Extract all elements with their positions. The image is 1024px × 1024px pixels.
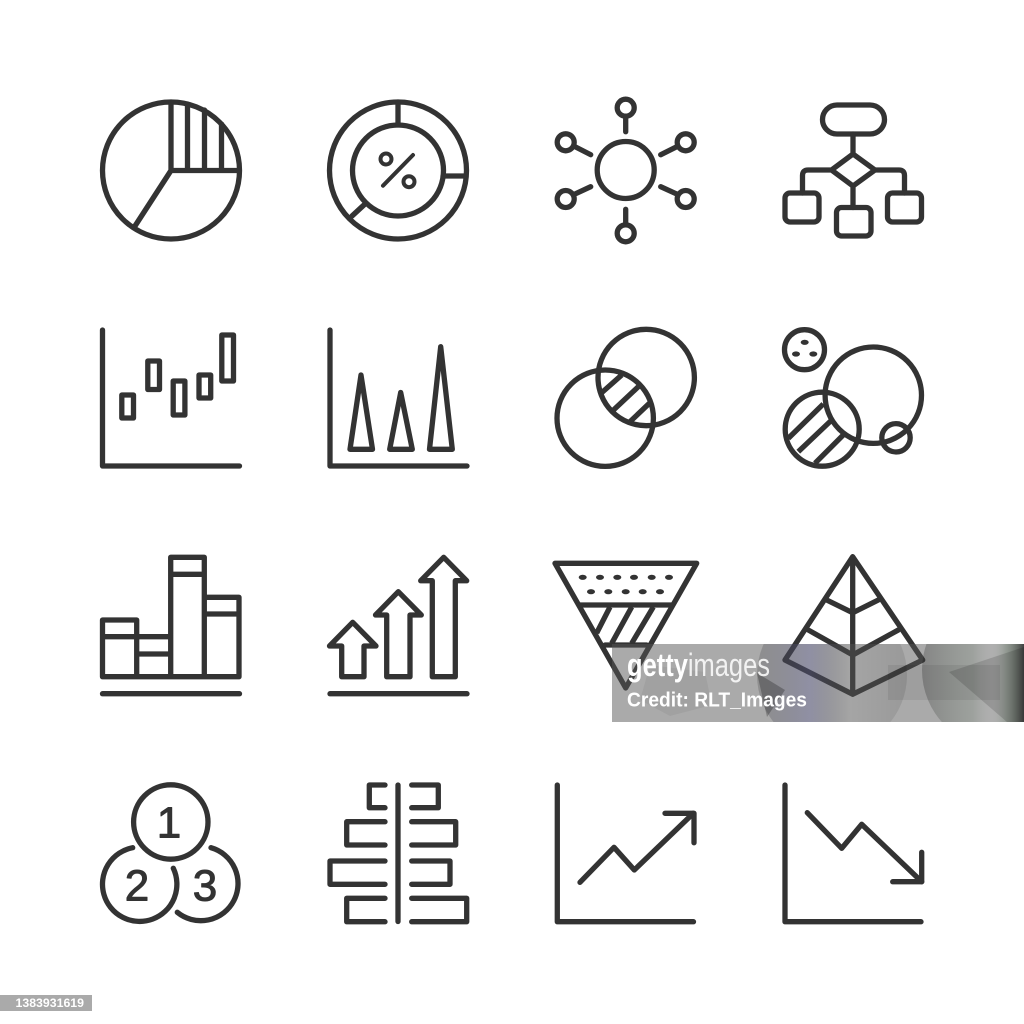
icon: candlestick chart: [102, 330, 240, 466]
icon: upward trend line chart: [557, 785, 694, 922]
icon: bubble chart: [784, 330, 922, 466]
watermark logo text: gettyimages: [627, 647, 770, 683]
icon: three numbered circles: 1: [157, 798, 181, 848]
icon: three numbered circles: [102, 785, 238, 921]
watermark banner: [612, 644, 1024, 722]
icon: percent donut chart: [330, 102, 466, 239]
icon: population pyramid chart: [330, 785, 467, 922]
icon: flowchart: [785, 105, 922, 236]
icon: stacked bar chart: [102, 557, 240, 694]
icon: 3D pyramid: [785, 557, 923, 694]
icon: triangle peak chart: [330, 330, 467, 466]
icon: three numbered circles: 2: [125, 862, 149, 910]
icon: hub and spoke network: [557, 99, 694, 242]
icon: three numbered circles: 3: [193, 862, 217, 910]
image ID strip: 1383931619: [16, 996, 84, 1010]
icon: downward trend line chart: [785, 785, 922, 922]
image ID strip: [0, 995, 92, 1011]
icon: venn diagram with hatched overlap: [557, 329, 694, 466]
watermark credit text: Credit: RLT_Images: [627, 690, 807, 712]
icon: pie chart with hatched slice: [102, 102, 240, 239]
icon: rising arrows: [330, 557, 467, 694]
icon: funnel chart: [555, 563, 697, 688]
